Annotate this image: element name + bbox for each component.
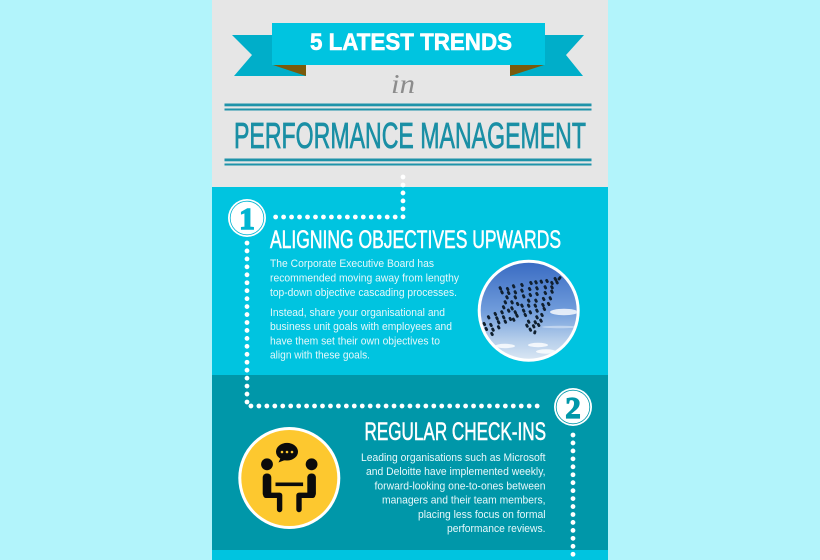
body text: have them set their own objectives to — [270, 336, 440, 348]
infographic canvas — [212, 0, 608, 560]
body text: and Deloitte have implemented weekly, — [366, 466, 546, 478]
panel: section 3 background — [212, 550, 608, 560]
body text: align with these goals. — [270, 350, 370, 362]
speech bubble — [276, 443, 298, 462]
dotted connector path — [247, 177, 573, 560]
panel: section 1 background — [212, 187, 608, 375]
body text — [270, 258, 459, 362]
number badge 2 — [554, 388, 592, 426]
heading: ALIGNING OBJECTIVES UPWARDS — [270, 226, 561, 254]
body text: The Corporate Executive Board has — [270, 258, 434, 270]
panel: aligning objectives upwards — [270, 226, 580, 362]
heading: REGULAR CHECK-INS — [364, 418, 546, 446]
body text: performance reviews. — [447, 523, 546, 535]
ribbon banner — [232, 23, 584, 76]
body text — [361, 452, 546, 535]
body text: forward-looking one-to-ones between — [374, 480, 546, 492]
body text: business unit goals with employees and — [270, 321, 452, 333]
number badge 1 — [228, 199, 266, 237]
body text: managers and their team members, — [382, 494, 546, 506]
body text: top-down objective cascading processes. — [270, 287, 457, 299]
body text: Leading organisations such as Microsoft — [361, 452, 546, 464]
title: performance management: PERFORMANCE MANAGEMENT — [234, 115, 586, 156]
body text: recommended moving away from lengthy — [270, 272, 459, 284]
number badge 2: 2 — [565, 390, 581, 425]
panel: section 2 background — [212, 375, 608, 550]
panel: header — [212, 0, 608, 187]
icon: two people meeting at a table — [238, 427, 340, 529]
number badge 1: 1 — [239, 201, 255, 236]
people and table — [261, 458, 318, 510]
word: in: in — [391, 69, 415, 99]
image: birds flying in arrow formation — [478, 260, 580, 362]
body text: Instead, share your organisational and — [270, 307, 445, 319]
body text: placing less focus on formal — [418, 509, 546, 521]
ribbon banner: 5 LATEST TRENDS — [310, 29, 512, 56]
panel: regular check-ins — [238, 418, 546, 535]
